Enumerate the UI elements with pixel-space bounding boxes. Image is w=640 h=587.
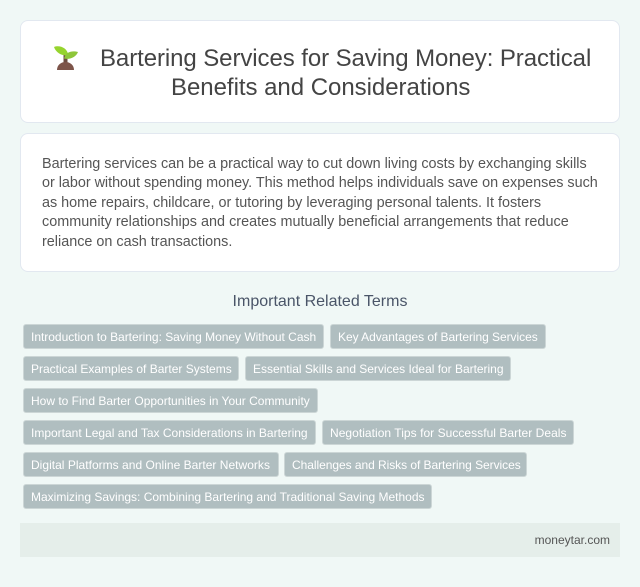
tag: [245, 356, 511, 381]
tag: [23, 388, 318, 413]
tag: [23, 356, 239, 381]
panel: header card: [20, 20, 620, 123]
tag: [322, 420, 574, 445]
tag: How to Find Barter Opportunities in Your Community: [31, 394, 310, 408]
tag: Maximizing Savings: Combining Bartering and Traditional Saving Methods: [31, 490, 425, 504]
tag: [23, 324, 324, 349]
icon: sprout: [54, 46, 78, 70]
panel: description card: [20, 133, 620, 272]
description text line 4: community relationships and creates mutually beneficial arrangements that reduce: [42, 214, 569, 230]
tag: Key Advantages of Bartering Services: [338, 330, 538, 344]
tag: Essential Skills and Services Ideal for Bartering: [253, 362, 503, 376]
tag: Important Legal and Tax Considerations in Bartering: [31, 426, 308, 440]
title: Bartering Services for Saving Money: Practical: [100, 45, 591, 72]
footer source text: moneytar.com: [535, 533, 610, 547]
tag: Practical Examples of Barter Systems: [31, 362, 232, 376]
tag: Negotiation Tips for Successful Barter Deals: [330, 426, 567, 440]
description text line 5: reliance on cash transactions.: [42, 234, 232, 250]
tag: Digital Platforms and Online Barter Networks: [31, 458, 270, 472]
description text line 2: or labor without spending money. This method helps individuals save on expenses such: [42, 175, 598, 191]
heading: important related terms: Important Related Terms: [233, 293, 407, 310]
description text: Bartering services can be a practical way to cut down living costs by exchanging skills: [42, 156, 587, 172]
description text line 3: as home repairs, childcare, or tutoring by leveraging personal talents. It fosters: [42, 195, 541, 211]
tag: [23, 452, 279, 477]
footer bar: [20, 523, 620, 557]
tag: [23, 484, 432, 509]
tag: [330, 324, 546, 349]
tag: [23, 420, 316, 445]
tag: [284, 452, 527, 477]
tag: Challenges and Risks of Bartering Services: [292, 458, 521, 472]
tag: Introduction to Bartering: Saving Money Without Cash: [31, 330, 316, 344]
title line 2: Benefits and Considerations: [171, 74, 470, 101]
